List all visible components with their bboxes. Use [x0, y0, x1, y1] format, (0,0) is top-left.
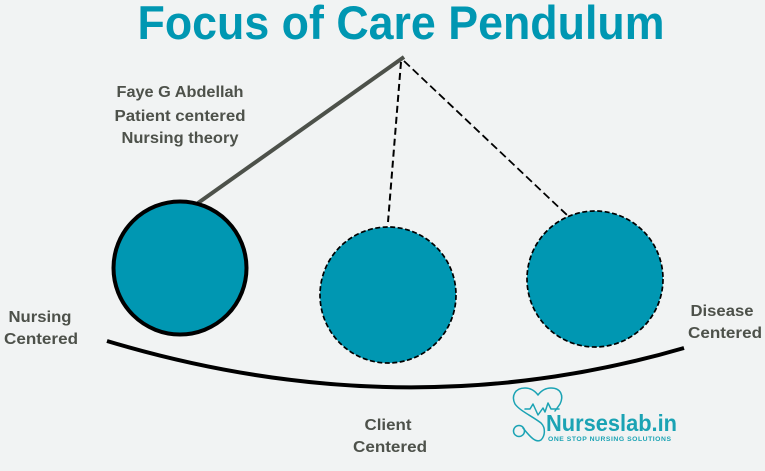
circle: right pendulum bob — [527, 211, 663, 347]
pendulum rod: dashed right — [404, 61, 567, 215]
circle: left pendulum bob — [114, 202, 246, 334]
text block: Faye G Abdellah: Faye G Abdellah — [116, 84, 244, 101]
label: Nursing Centered: Centered — [4, 331, 78, 348]
pendulum rod: dashed centre — [388, 62, 401, 222]
label: Client Centered: Centered — [353, 439, 427, 456]
label: Nursing Centered — [4, 309, 78, 348]
arc: pendulum swing path — [107, 341, 684, 387]
label: Nursing Centered: Nursing — [8, 309, 72, 326]
circle: centre pendulum bob — [320, 227, 456, 363]
logo: Nurseslab.in — [513, 388, 677, 443]
label: Client Centered — [353, 417, 427, 456]
label: Disease Centered — [688, 303, 762, 342]
pendulum rod: solid — [198, 57, 404, 203]
text block: Faye G Abdellah: Nursing theory — [122, 130, 239, 147]
text block: Faye G Abdellah: Patient centered — [114, 108, 246, 125]
tagline: ONE STOP NURSING SOLUTIONS — [548, 436, 671, 443]
label: Disease Centered: Disease — [690, 303, 754, 320]
text block: Faye G Abdellah — [114, 84, 246, 147]
label: Client Centered: Client — [364, 417, 412, 434]
wordmark: Nurseslab.in — [546, 410, 677, 436]
icon: heart stethoscope — [513, 388, 562, 441]
label: Disease Centered: Centered — [688, 325, 762, 342]
